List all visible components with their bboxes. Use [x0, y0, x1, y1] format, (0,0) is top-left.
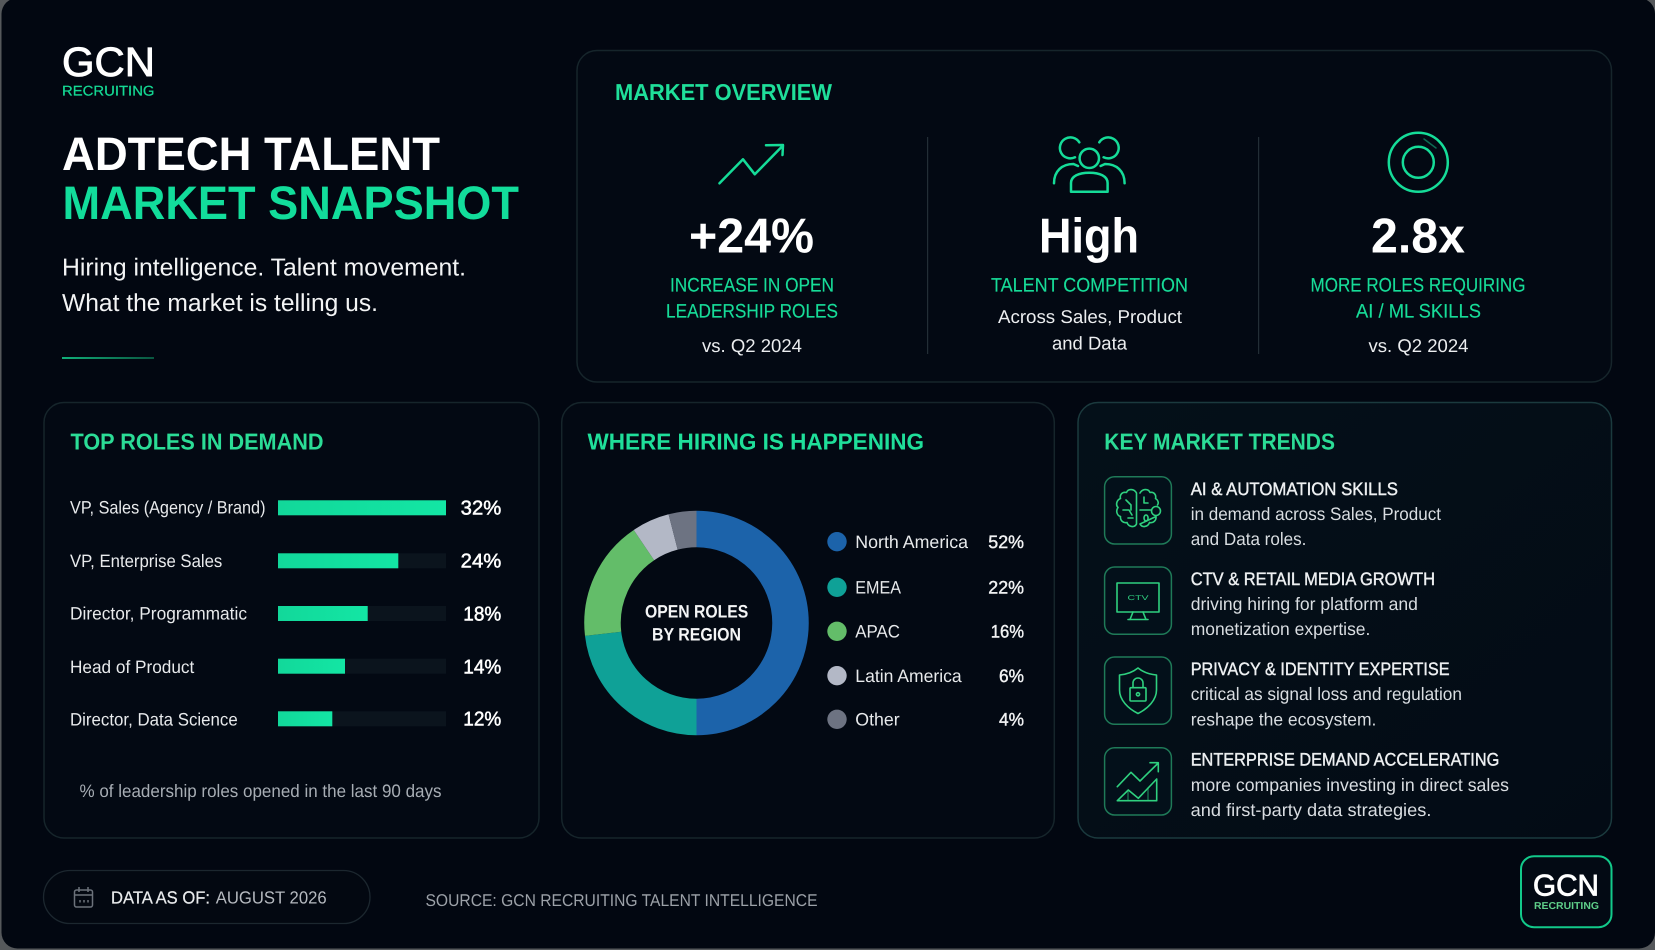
bar: Director Programmatic: 18%: [463, 603, 502, 625]
stat: 2.8x AI / ML roles: [1310, 133, 1526, 356]
bar: VP Sales: 32%: [461, 497, 502, 519]
legend: North America: [855, 532, 969, 552]
legend: 52%: [988, 532, 1024, 552]
icon: shield with lock: [1120, 668, 1156, 714]
trend: privacy and identity: critical as signal loss and regulation: [1191, 684, 1462, 704]
legend: 16%: [991, 622, 1024, 642]
legend: 6%: [999, 666, 1024, 686]
footer: data date pill: [44, 870, 370, 924]
footer: data date pill: DATA AS OF:: [111, 887, 210, 907]
donut chart: open roles by region: BY REGION: [652, 624, 741, 644]
trend: CTV and retail media: monetization expertise.: [1191, 619, 1370, 639]
trend: CTV and retail media: driving hiring for platform and: [1191, 594, 1418, 614]
icon: growth chart: [1117, 763, 1158, 801]
legend: 22%: [988, 577, 1024, 597]
stat: +24% open leadership roles: [666, 145, 838, 356]
panel: top roles in demand: [44, 402, 539, 838]
logo: GCN Recruiting: GCN: [62, 39, 155, 85]
trend: enterprise demand: [1105, 748, 1509, 820]
stat: +24% open leadership roles: LEADERSHIP ROLES: [666, 300, 838, 322]
icon: rising arrow: [720, 145, 783, 183]
stat: +24% open leadership roles: INCREASE IN OPEN: [670, 275, 834, 297]
heading: top roles: TOP ROLES IN DEMAND: [70, 428, 324, 454]
donut chart: open roles by region: [602, 529, 790, 717]
legend: 4%: [999, 710, 1024, 730]
chart footnote: % of leadership roles opened in the last 90 days: [80, 781, 442, 801]
legend: Other: [855, 710, 900, 730]
trend: AI and automation: [1105, 477, 1441, 549]
bar: VP Sales: [70, 497, 502, 519]
bar: Director Data Science: [70, 709, 502, 731]
icon: group of people: [1054, 137, 1125, 192]
heading: market overview: MARKET OVERVIEW: [615, 79, 832, 105]
icon: monitor: [1117, 583, 1159, 620]
trend: privacy and identity: [1105, 657, 1462, 729]
icon: monitor: CTV: [1128, 595, 1149, 602]
trend: CTV and retail media: CTV & RETAIL MEDIA GROWTH: [1191, 569, 1435, 589]
icon: brain: [1117, 490, 1160, 527]
bar: Director Programmatic: Director, Programmatic: [70, 604, 247, 624]
bar: Head of Product: [70, 656, 502, 678]
legend: Latin America: [855, 666, 963, 686]
bar: Head of Product: 14%: [463, 656, 502, 678]
trend: CTV and retail media: [1105, 567, 1435, 639]
trend: enterprise demand: and first-party data strategies.: [1191, 800, 1431, 820]
bar: VP Enterprise Sales: 24%: [461, 550, 502, 572]
bar: Head of Product: Head of Product: [70, 657, 194, 677]
icon: target: [1389, 133, 1448, 192]
stat: 2.8x AI / ML roles: MORE ROLES REQUIRING: [1310, 275, 1526, 297]
donut chart: open roles by region: OPEN ROLES: [645, 601, 748, 621]
stat: 2.8x AI / ML roles: vs. Q2 2024: [1368, 335, 1468, 356]
subtitle: What the market is telling us.: [62, 290, 378, 317]
stat: +24% open leadership roles: vs. Q2 2024: [702, 335, 802, 356]
stat: 2.8x AI / ML roles: 2.8x: [1371, 210, 1465, 264]
stat: high talent competition: and Data: [1052, 333, 1128, 354]
panel: market overview: [577, 50, 1612, 382]
stat: high talent competition: TALENT COMPETITION: [991, 275, 1188, 297]
title: ADTECH TALENT: [62, 127, 440, 180]
trend: enterprise demand: more companies investing in direct sales: [1191, 775, 1509, 795]
stat: high talent competition: [991, 137, 1188, 354]
subtitle: Hiring intelligence. Talent movement.: [62, 254, 466, 281]
logo badge: GCN: [1533, 870, 1599, 903]
footer: data date pill: AUGUST 2026: [216, 887, 327, 907]
footer: source: SOURCE: GCN RECRUITING TALENT INTELLIGENCE: [426, 891, 818, 910]
heading: where hiring: WHERE HIRING IS HAPPENING: [588, 428, 924, 454]
logo badge: RECRUITING: [1534, 901, 1599, 912]
trend: AI and automation: AI & AUTOMATION SKILLS: [1191, 479, 1398, 499]
bar: Director Programmatic: [70, 603, 502, 625]
bar chart: roles: [70, 497, 502, 731]
title: MARKET SNAPSHOT: [62, 176, 519, 229]
trend: AI and automation: in demand across Sales, Product: [1191, 504, 1441, 524]
trend: privacy and identity: reshape the ecosystem.: [1191, 709, 1376, 729]
subtitle: [62, 254, 466, 317]
panel: key market trends: [1078, 402, 1612, 838]
bar: Director Data Science: Director, Data Science: [70, 710, 238, 730]
stat: +24% open leadership roles: +24%: [689, 210, 814, 264]
legend: [827, 532, 1024, 730]
bar: VP Enterprise Sales: [70, 550, 502, 572]
stat: high talent competition: High: [1039, 210, 1139, 264]
trend: AI and automation: and Data roles.: [1191, 529, 1306, 549]
panel: where hiring is happening: [562, 402, 1054, 838]
trend: enterprise demand: ENTERPRISE DEMAND ACCELERATING: [1191, 750, 1499, 770]
accent rule: [62, 357, 154, 359]
icon: calendar: [74, 887, 92, 907]
legend: EMEA: [855, 577, 901, 597]
stat: high talent competition: Across Sales, Product: [998, 306, 1182, 327]
heading: key trends: KEY MARKET TRENDS: [1104, 428, 1335, 454]
legend: APAC: [855, 622, 900, 642]
logo badge: [1521, 856, 1612, 927]
trend: privacy and identity: PRIVACY & IDENTITY EXPERTISE: [1191, 659, 1450, 679]
bar: Director Data Science: 12%: [463, 709, 502, 731]
stat: 2.8x AI / ML roles: AI / ML SKILLS: [1356, 300, 1481, 322]
logo: GCN Recruiting: RECRUITING: [62, 83, 154, 99]
bar: VP Enterprise Sales: VP, Enterprise Sales: [70, 551, 222, 571]
title: [62, 127, 519, 229]
bar: VP Sales: VP, Sales (Agency / Brand): [70, 498, 266, 518]
